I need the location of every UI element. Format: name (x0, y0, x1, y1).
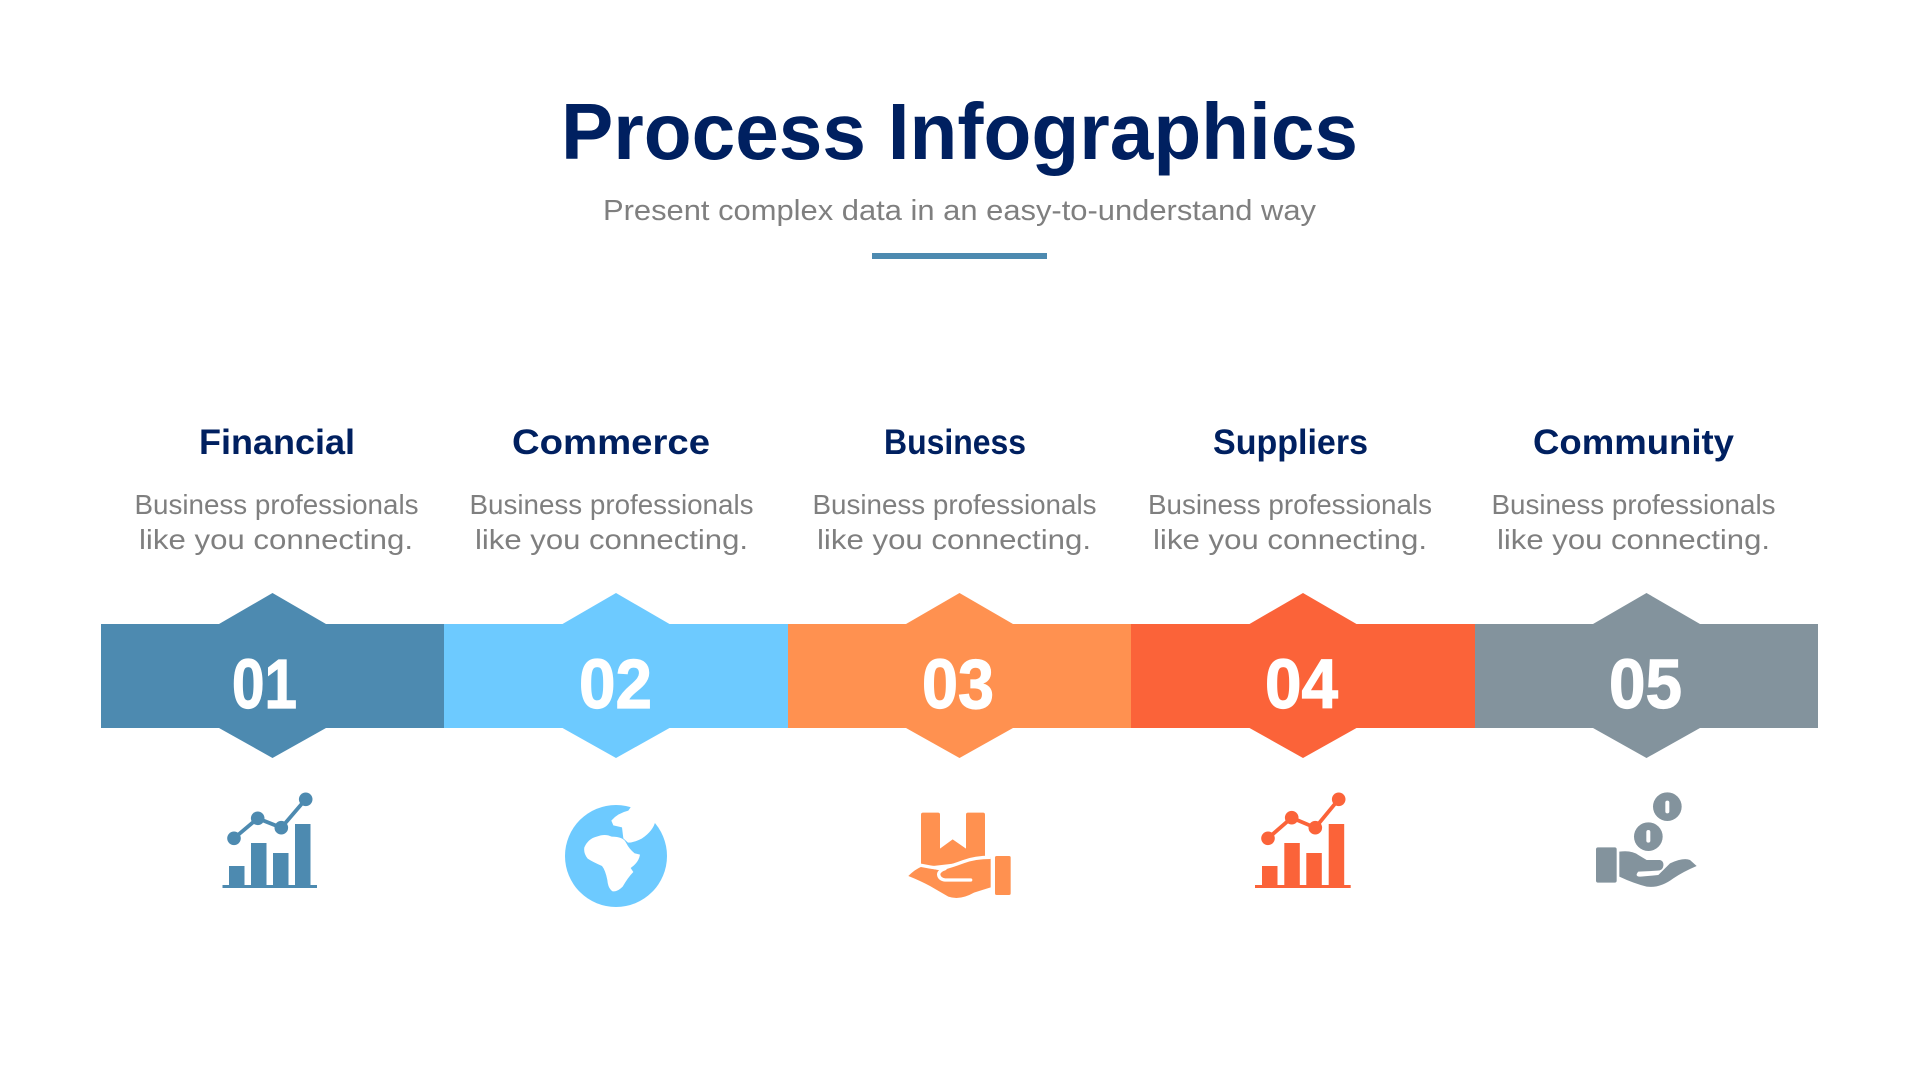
band segment 05 (1475, 593, 1818, 758)
heading: Suppliers: Suppliers (1213, 423, 1368, 462)
text block: Business description: like you connecting. (817, 524, 1091, 555)
band segment 02: 02 (579, 645, 652, 723)
text block: Community description: like you connecting. (1497, 524, 1770, 555)
text block: Community description: Business professionals (1492, 489, 1776, 520)
heading: Business: Business (884, 423, 1026, 462)
band segment 01 (101, 593, 444, 758)
heading: Financial: Financial (199, 423, 355, 462)
band segment 04: 04 (1265, 645, 1338, 723)
text block: Financial description: Business professionals (134, 489, 418, 520)
band segment 01: 01 (232, 645, 297, 723)
icon: globe (565, 803, 670, 907)
text block: Suppliers description (1148, 489, 1432, 555)
icon: hand holding box (908, 813, 1011, 898)
text block: Financial description (134, 489, 418, 555)
band segment 03: 03 (922, 645, 994, 723)
text block: Community description (1492, 489, 1776, 555)
title: Process Infographics (561, 87, 1358, 176)
text block: Commerce description: Business professionals (470, 489, 754, 520)
text block: Suppliers description: Business professionals (1148, 489, 1432, 520)
icon: bar and line chart (blue) (222, 792, 317, 888)
band segment 05: 05 (1609, 645, 1682, 723)
text block: Business description: Business professionals (812, 489, 1096, 520)
icon: bar and line chart (orange) (1255, 792, 1351, 888)
title underline (872, 253, 1047, 259)
text block: Commerce description (470, 489, 754, 555)
band segment 04 (1131, 593, 1475, 758)
text block: Business description (812, 489, 1096, 555)
icon: hand with coins (1596, 792, 1697, 887)
heading: Community: Community (1533, 423, 1735, 462)
text block: Financial description: like you connecting. (139, 524, 413, 555)
band segment 02 (444, 593, 788, 758)
text block: Commerce description: like you connecting. (475, 524, 748, 555)
subtitle: Present complex data in an easy-to-understand way (603, 195, 1317, 227)
band segment 03 (788, 593, 1132, 758)
heading: Commerce: Commerce (512, 423, 710, 462)
text block: Suppliers description: like you connecting. (1153, 524, 1427, 555)
